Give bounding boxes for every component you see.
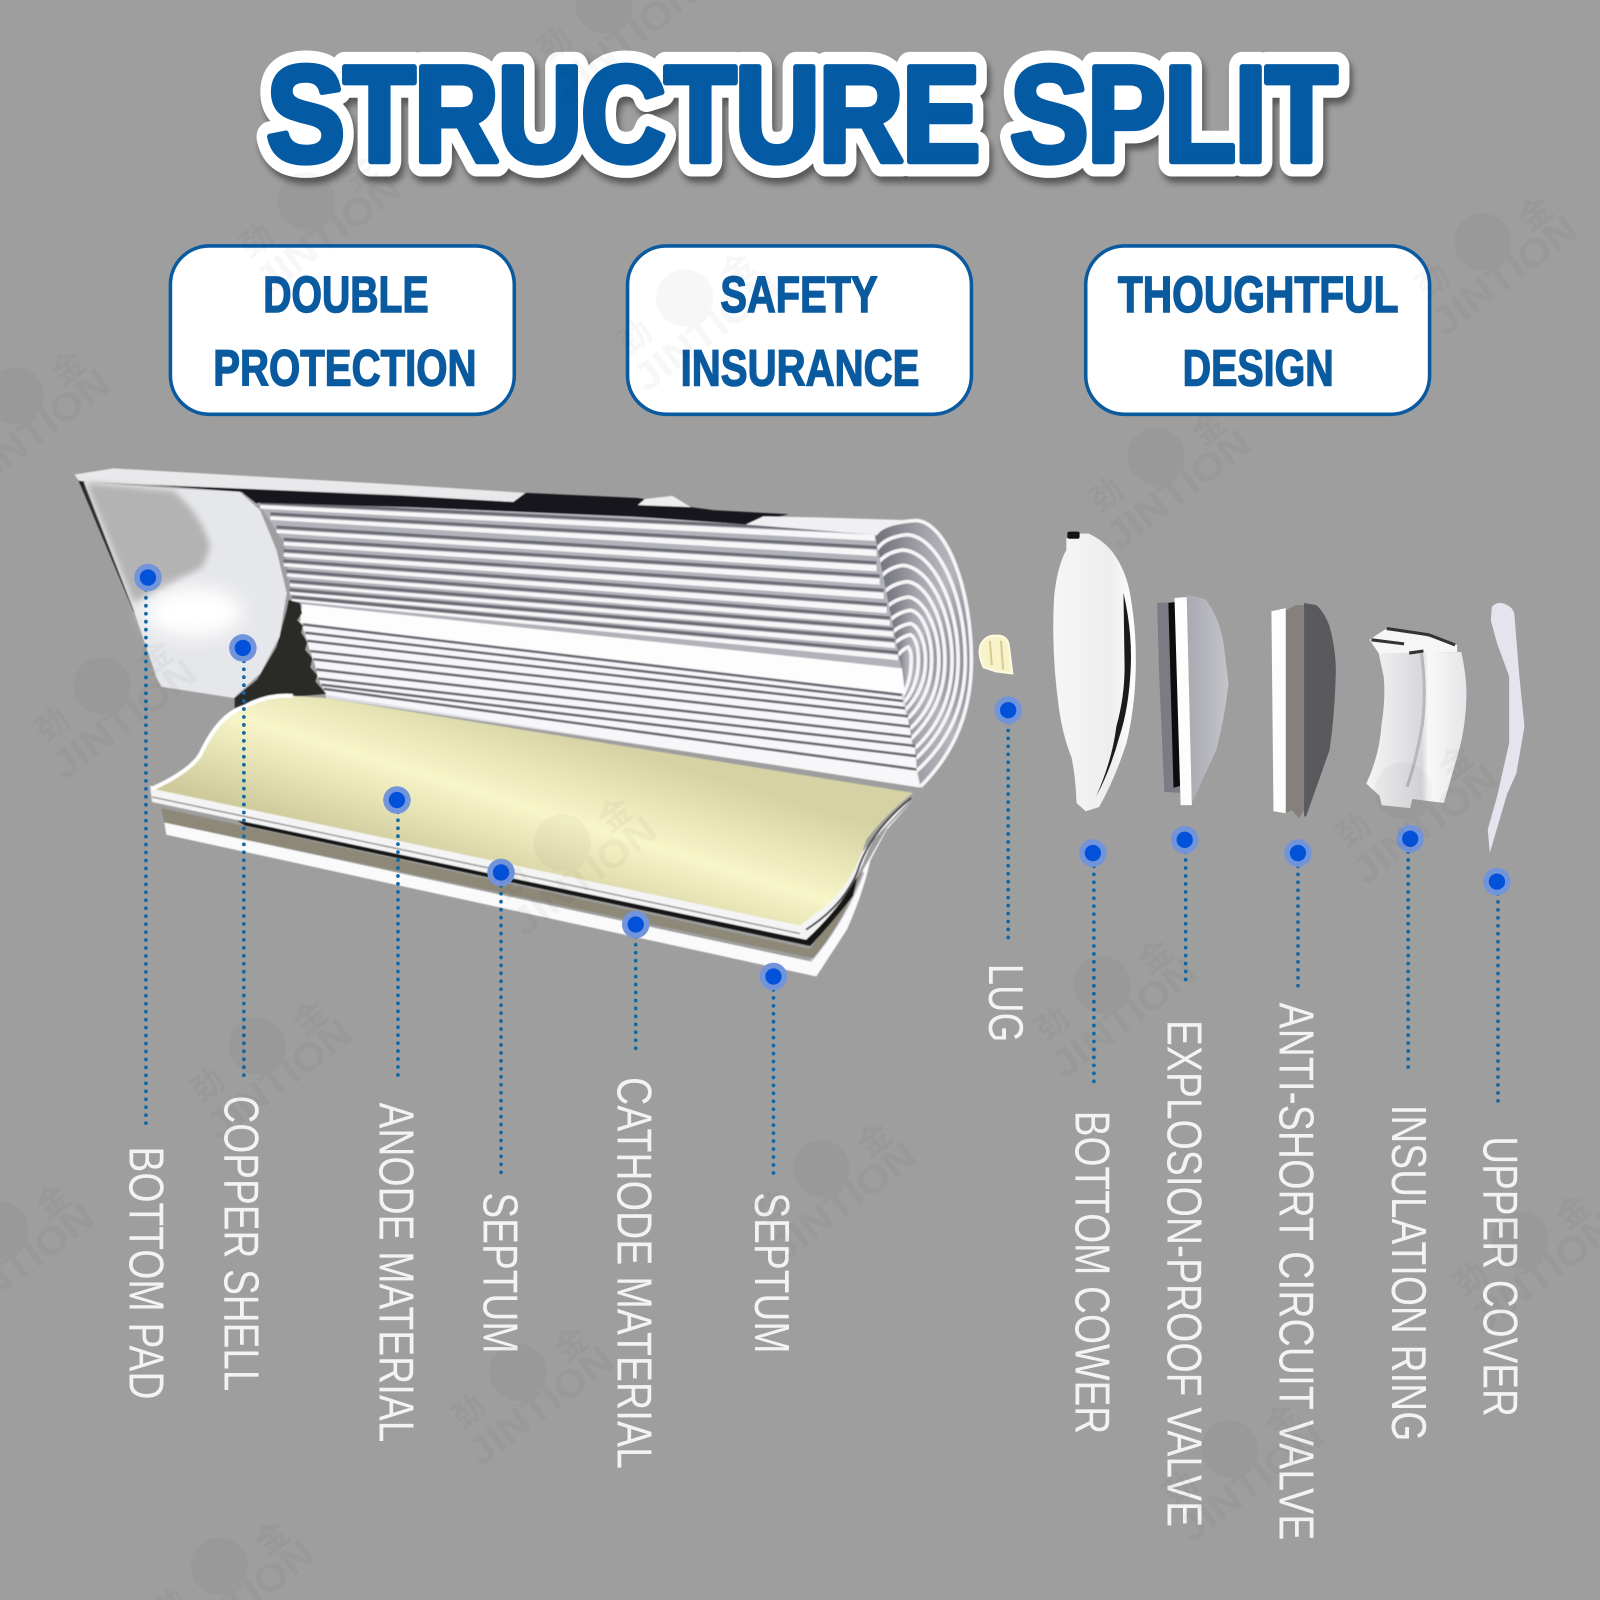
top black band xyxy=(150,485,789,524)
battery cell cutaway xyxy=(74,468,971,977)
label: copper shell: COPPER SHELL xyxy=(213,1095,267,1391)
watermarks: 金 xyxy=(1130,931,1179,981)
watermarks: 劲 xyxy=(1329,805,1377,854)
top right casing xyxy=(746,516,916,535)
watermarks: 金 xyxy=(1511,189,1560,238)
watermarks: 劲 xyxy=(747,1182,796,1232)
watermarks: 金 xyxy=(44,343,92,392)
label: anode material: ANODE MATERIAL xyxy=(369,1103,423,1442)
watermarks: JINTION xyxy=(43,651,205,788)
watermarks: 劲 xyxy=(1028,999,1076,1048)
watermarks: JINTION xyxy=(1424,207,1586,344)
watermarks: 金 xyxy=(850,1115,899,1164)
marker dots xyxy=(134,564,1511,990)
panel: thoughtful design: THOUGHTFUL xyxy=(1118,266,1398,323)
watermarks: JINTION xyxy=(504,808,666,945)
lower stripes base xyxy=(300,620,920,787)
upper cover part xyxy=(1488,603,1524,853)
bottom pad shade xyxy=(86,483,210,603)
watermarks: 劲 xyxy=(610,312,659,361)
watermarks: 劲 xyxy=(232,215,280,264)
top casing strip xyxy=(74,468,526,502)
label: cathode material: CATHODE MATERIAL xyxy=(606,1077,660,1469)
watermarks: 劲 xyxy=(1155,1463,1204,1512)
icon: lug xyxy=(980,636,1012,673)
title: STRUCTURE SPLIT xyxy=(266,37,1337,190)
watermarks: JINTION xyxy=(626,263,788,400)
panel: double protection: DOUBLE xyxy=(263,266,429,323)
white band xyxy=(300,604,905,694)
title: STRUCTURE SPLIT xyxy=(266,37,1337,190)
upper stripes xyxy=(260,503,898,660)
watermarks: JINTION xyxy=(1171,1414,1333,1551)
watermarks: 金 xyxy=(335,148,383,197)
copper shell disc xyxy=(84,482,287,698)
watermarks: 金 xyxy=(1432,738,1480,787)
label: lug: LUG xyxy=(978,964,1032,1042)
watermarks: 劲 xyxy=(488,857,536,906)
watermarks: 金 xyxy=(248,1513,296,1562)
watermarks: JINTION xyxy=(1344,756,1506,893)
watermarks: 金 xyxy=(130,632,179,682)
watermarks: 金 xyxy=(1549,1186,1597,1236)
upper stripes base xyxy=(256,500,902,671)
watermarks: 金 xyxy=(28,1176,77,1226)
watermarks: 劲 xyxy=(444,1387,492,1436)
watermarks: 金 xyxy=(1185,403,1233,452)
panel: double protection xyxy=(170,246,514,414)
watermarks: 金 xyxy=(591,790,639,839)
explosion-proof valve part xyxy=(1157,595,1229,805)
anode yellow sheet xyxy=(152,696,913,926)
watermarks: 金 xyxy=(547,1319,595,1369)
label: septum 2: SEPTUM xyxy=(744,1192,798,1354)
watermarks: 劲 xyxy=(1446,1254,1495,1303)
panel: thoughtful design: DESIGN xyxy=(1183,340,1334,397)
watermarks: 金 xyxy=(1258,1396,1307,1445)
watermarks: JINTION xyxy=(199,1011,361,1148)
watermarks: 劲 xyxy=(183,1060,231,1109)
watermarks: 金 xyxy=(713,245,762,294)
panel: double protection: PROTECTION xyxy=(213,340,477,397)
black wedge xyxy=(235,600,327,711)
watermarks: JINTION xyxy=(248,167,409,303)
watermarks: JINTION xyxy=(1098,422,1259,558)
highlight xyxy=(145,588,243,637)
casing bump xyxy=(638,496,691,507)
watermarks: JINTION xyxy=(460,1338,622,1475)
watermarks: 劲 xyxy=(28,700,76,749)
bottom cover part xyxy=(1053,532,1136,811)
label: septum: SEPTUM xyxy=(473,1192,527,1354)
label: upper cover: UPPER COVER xyxy=(1473,1136,1527,1417)
lower stripes xyxy=(303,624,920,788)
insulation ring part xyxy=(1366,629,1466,808)
nested wound arcs xyxy=(875,520,971,787)
bottom layers of wrapper xyxy=(150,786,913,977)
anti-short circuit valve part xyxy=(1271,603,1336,818)
panel: thoughtful design xyxy=(1086,246,1430,414)
leader lines xyxy=(146,590,1498,1178)
panel: safety insurance: SAFETY xyxy=(720,266,878,323)
label: bottom cower: BOTTOM COWER xyxy=(1065,1111,1119,1434)
panel: safety insurance: INSURANCE xyxy=(681,340,919,397)
label: bottom pad: BOTTOM PAD xyxy=(119,1146,173,1399)
panel: safety insurance xyxy=(628,246,971,414)
label: insulation ring: INSULATION RING xyxy=(1381,1105,1435,1441)
watermarks: 劲 xyxy=(530,19,578,68)
watermarks: 劲 xyxy=(1408,256,1457,305)
watermarks: JINTION xyxy=(763,1134,925,1271)
left dark edge xyxy=(79,481,140,612)
watermarks: 劲 xyxy=(1082,470,1130,519)
part labels xyxy=(119,964,1527,1540)
watermarks: JINTION xyxy=(1043,950,1205,1087)
watermarks: 金 xyxy=(286,993,334,1042)
